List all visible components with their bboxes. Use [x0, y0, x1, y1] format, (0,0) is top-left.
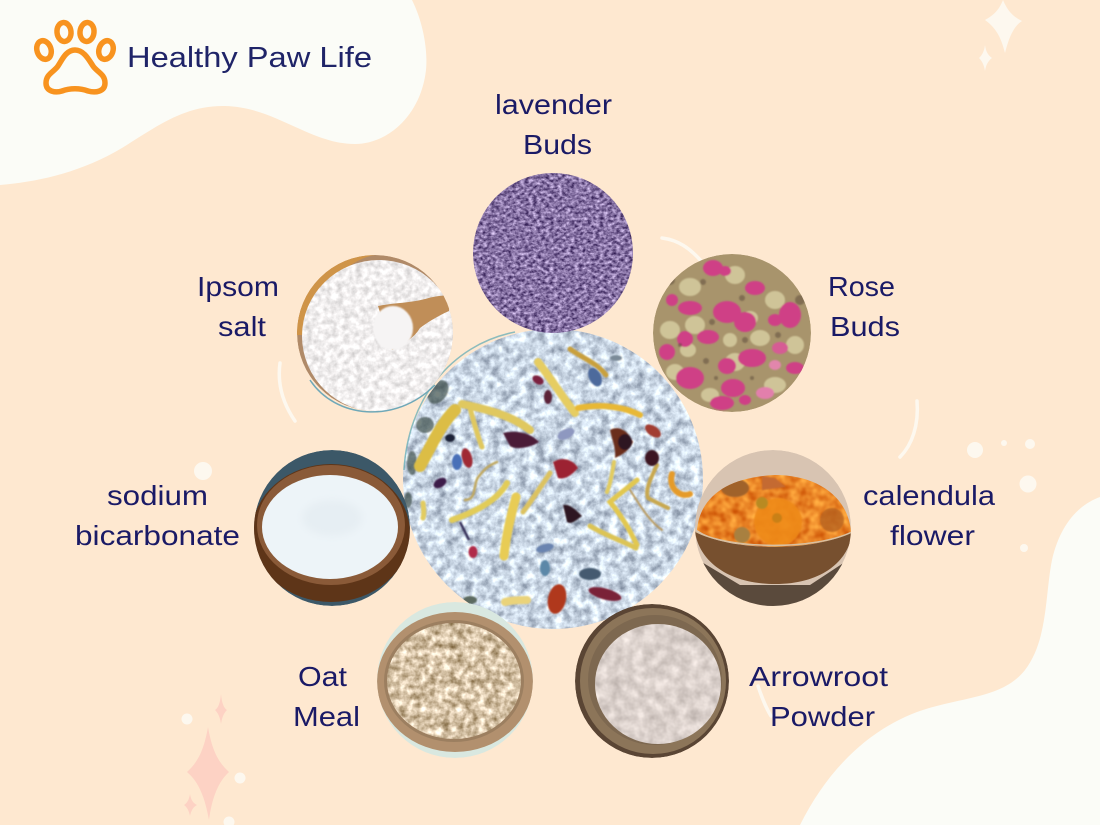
- ingredient: lavender buds photo: [472, 172, 634, 334]
- bottom-right white blob: [800, 497, 1100, 825]
- label: calendula flower: [863, 480, 995, 551]
- label: calendula flower: calendula: [863, 480, 995, 511]
- label: Arrowroot Powder: Powder: [770, 701, 875, 732]
- label: sodium bicarbonate: sodium: [107, 480, 208, 511]
- center photo rim highlight: [404, 332, 515, 470]
- label: Ipsom salt: Ipsom: [197, 271, 279, 302]
- rose bud bases: [660, 266, 804, 402]
- label: Rose Buds: [828, 271, 900, 342]
- logo wordmark: Healthy Paw Life: [127, 42, 372, 74]
- label: sodium bicarbonate: bicarbonate: [75, 520, 240, 551]
- ingredient: oat meal photo: [377, 602, 533, 758]
- bowl: [695, 531, 852, 584]
- dark left rim shadows: [404, 376, 453, 508]
- ingredient: center bath salt mix photo: [400, 326, 706, 632]
- label: Oat Meal: Oat: [298, 661, 347, 692]
- decoration: white arcs: [279, 238, 917, 716]
- table: [703, 562, 842, 606]
- yellow petals: [420, 349, 690, 602]
- label: lavender Buds: Buds: [523, 129, 592, 160]
- ingredient: sodium bicarbonate photo: [252, 450, 410, 606]
- dark petals: [432, 374, 663, 616]
- label: Arrowroot Powder: Arrowroot: [749, 661, 888, 692]
- logo: Healthy Paw Life: [34, 22, 372, 92]
- ingredient: epsom salt photo: [297, 255, 455, 413]
- epsom rim highlight: [310, 380, 435, 412]
- top-left white blob: [0, 0, 426, 185]
- ingredient: calendula flower photo: [695, 450, 855, 610]
- label: sodium bicarbonate: [75, 480, 240, 551]
- decoration: dots: [182, 439, 1036, 825]
- flowers: [697, 475, 851, 547]
- label: Rose Buds: Rose: [828, 271, 895, 302]
- ingredient: arrowroot powder photo: [575, 604, 730, 758]
- ingredient: rose buds photo: [653, 254, 811, 412]
- label: lavender Buds: [495, 89, 612, 160]
- label: Arrowroot Powder: [749, 661, 888, 732]
- shadows between buds: [656, 275, 805, 380]
- label: lavender Buds: lavender: [495, 89, 612, 120]
- decoration: sparkles top right: [979, 0, 1022, 71]
- rose bud petals: [659, 260, 804, 410]
- wooden spoon: [378, 296, 449, 350]
- label: Ipsom salt: salt: [218, 311, 266, 342]
- label: Ipsom salt: [197, 271, 279, 342]
- label: Oat Meal: Meal: [293, 701, 360, 732]
- label: Oat Meal: [293, 661, 360, 732]
- label: Rose Buds: Buds: [830, 311, 900, 342]
- icon: orange paw: [34, 22, 116, 92]
- blue petals: [452, 355, 622, 604]
- decoration: pink sparkles bottom left: [184, 694, 229, 820]
- label: calendula flower: flower: [890, 520, 975, 551]
